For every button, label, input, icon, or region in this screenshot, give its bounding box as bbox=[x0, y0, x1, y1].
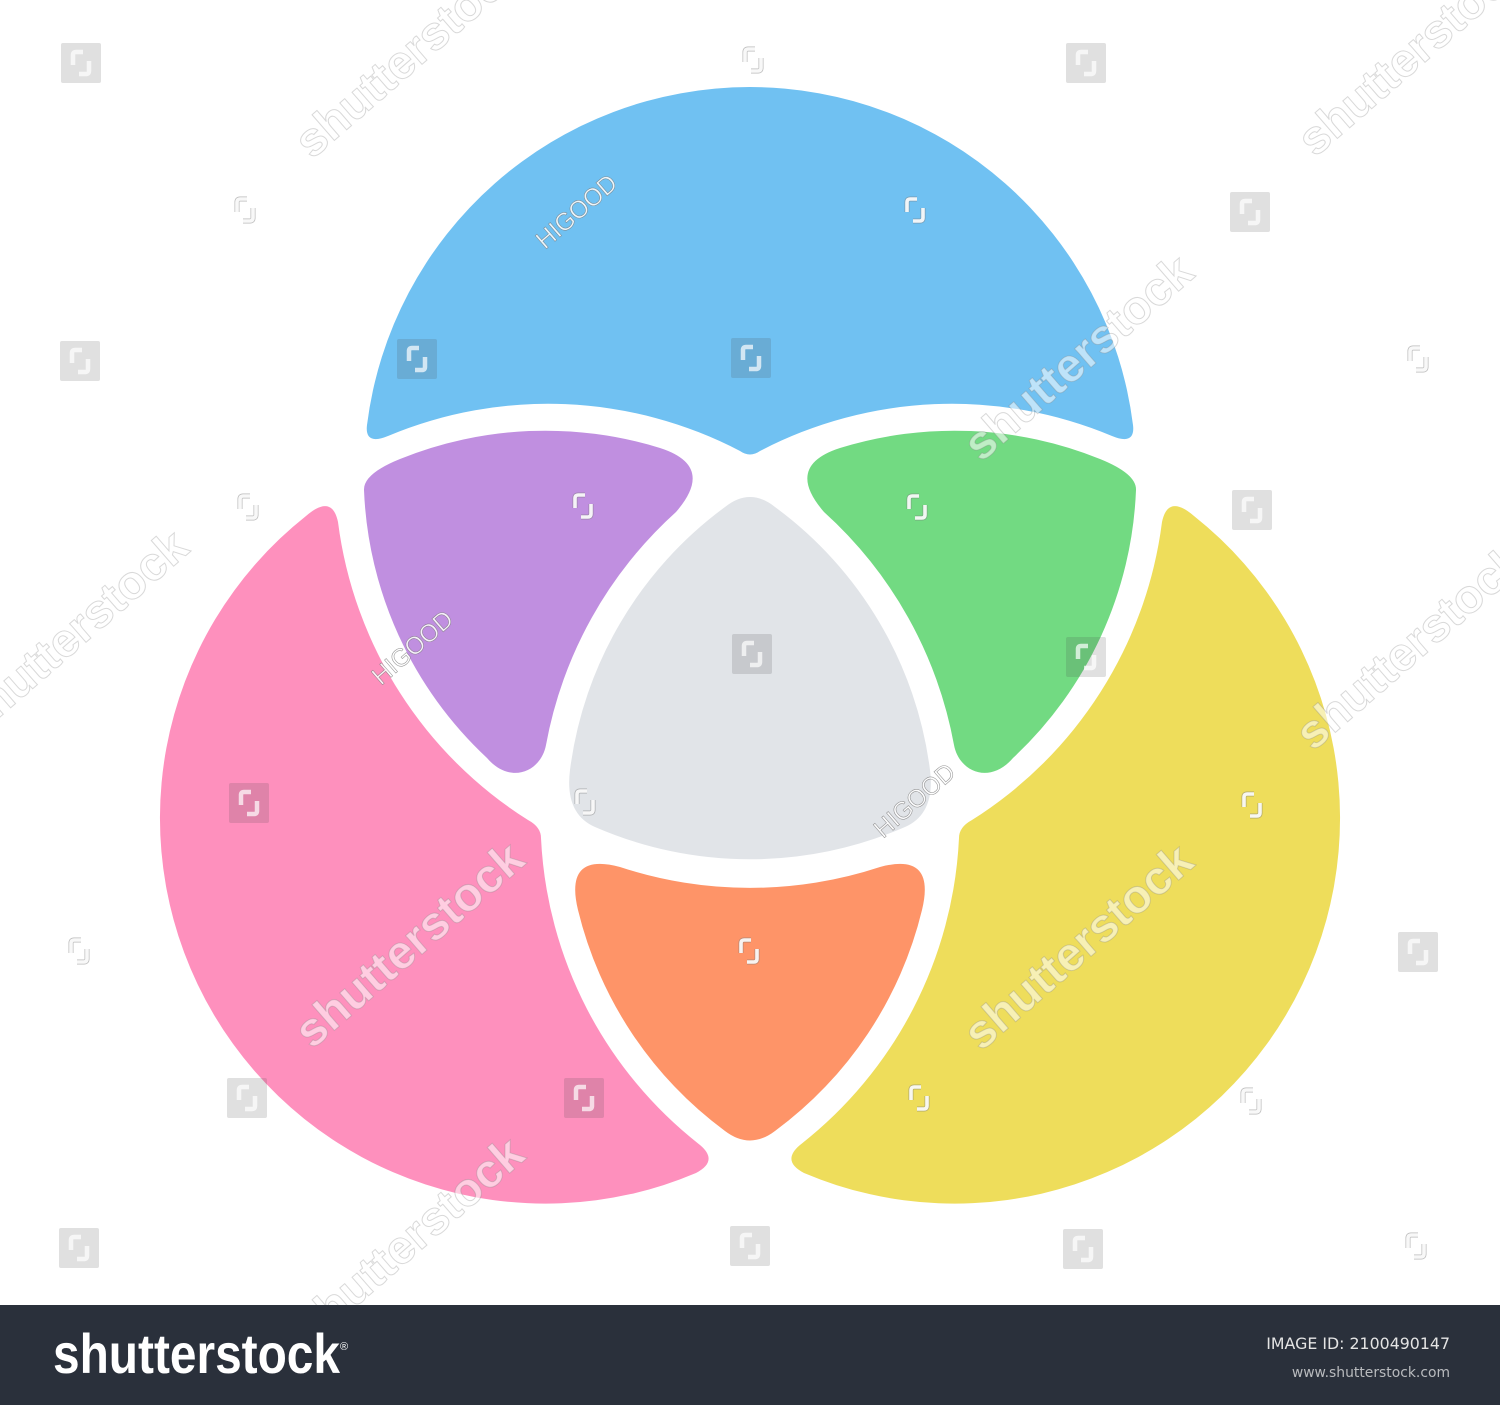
footer logo: shutterstock bbox=[53, 1322, 341, 1385]
watermark wordmarks: shutterstock bbox=[953, 832, 1203, 1060]
author marks: HIGOOD: HIGOOD bbox=[367, 605, 459, 691]
author marks: HIGOOD: HIGOOD bbox=[869, 758, 961, 844]
watermark small marks bbox=[71, 49, 1426, 1257]
watermark wordmarks: shutterstock bbox=[284, 1125, 534, 1353]
watermark wordmarks: shutterstock bbox=[284, 830, 534, 1058]
website: www.shutterstock.com bbox=[1292, 1365, 1450, 1381]
segment: green overlap bbox=[807, 431, 1136, 773]
registered mark: ® bbox=[340, 1341, 348, 1353]
segment: yellow right circle bbox=[791, 506, 1340, 1204]
venn diagram bbox=[160, 87, 1340, 1204]
watermark wordmarks: shutterstock bbox=[953, 243, 1203, 471]
author marks: HIGOOD: HIGOOD bbox=[531, 169, 623, 255]
segment: pink left circle bbox=[160, 506, 709, 1204]
segment: purple overlap bbox=[364, 431, 693, 773]
segment: grey centre bbox=[569, 497, 931, 859]
segment: orange overlap bbox=[575, 864, 925, 1140]
image id: IMAGE ID: 2100490147 bbox=[1266, 1334, 1450, 1353]
author marks: HIGOOD bbox=[367, 169, 961, 844]
footer bar bbox=[0, 1305, 1500, 1405]
segment: blue top circle bbox=[367, 87, 1133, 454]
